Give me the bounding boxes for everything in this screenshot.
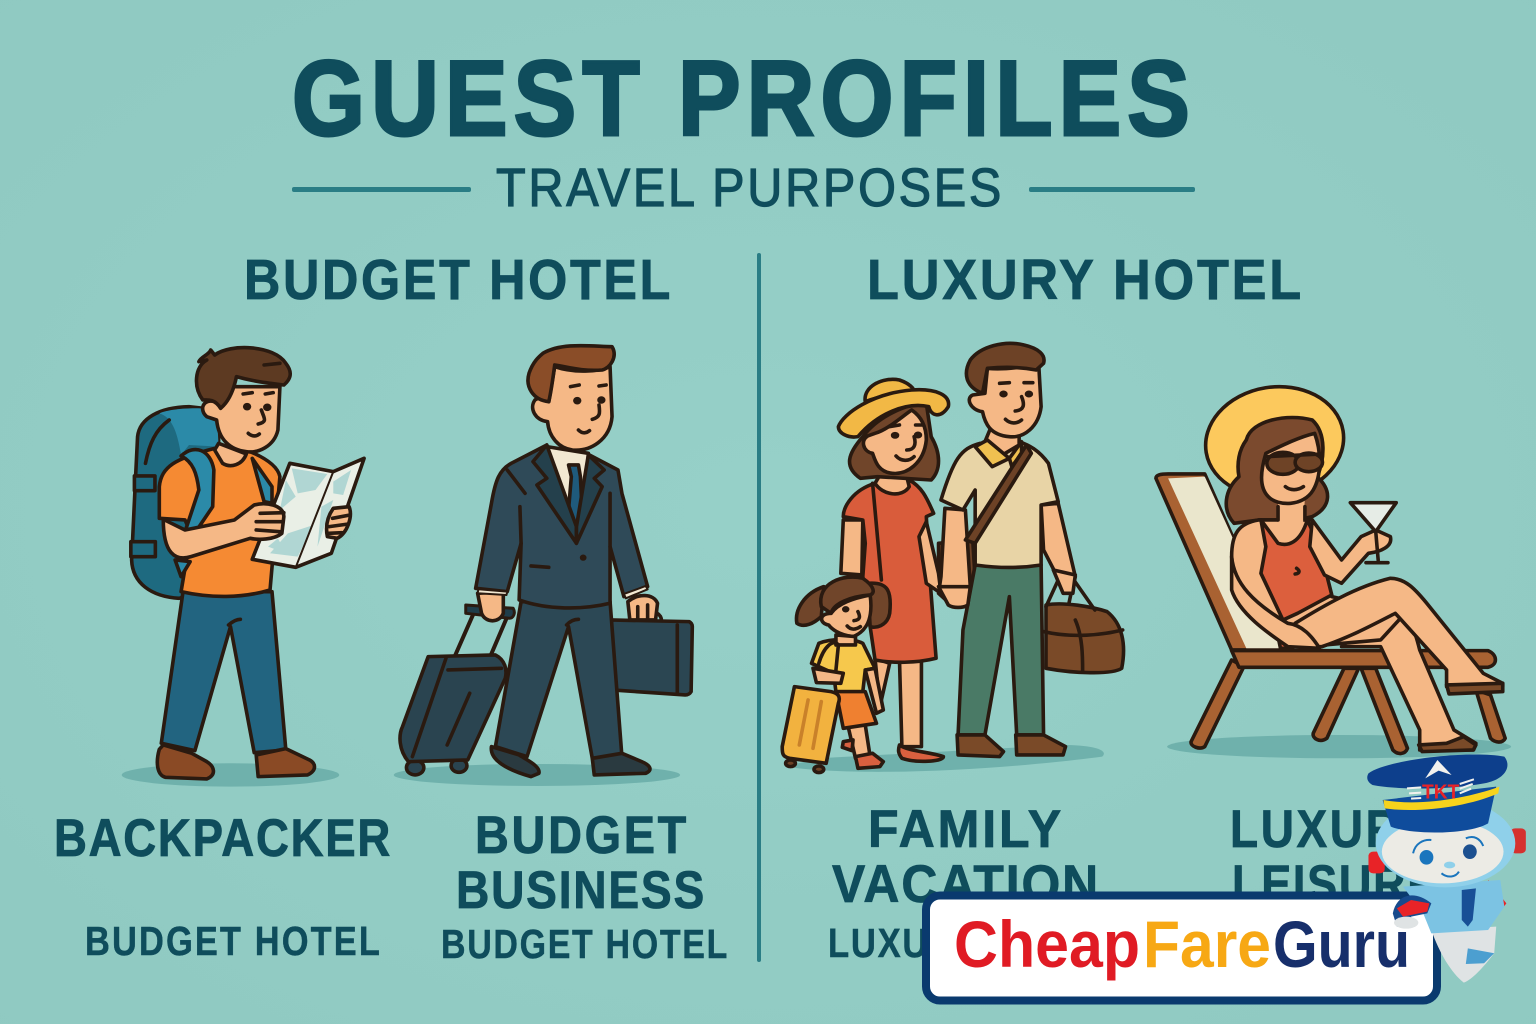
label: luxury leisure: LUXURY: [1230, 800, 1433, 859]
heading: budget hotel: BUDGET HOTEL: [244, 248, 673, 312]
child with suitcase: [782, 577, 890, 773]
label: budget business: [441, 806, 729, 967]
briefcase: [610, 610, 692, 695]
woman's hair: [1226, 417, 1328, 523]
label: budget business: BUSINESS: [456, 861, 706, 920]
folded map: [252, 458, 364, 567]
label: family vacation: [828, 800, 1116, 966]
label: family vacation: VACATION: [832, 855, 1100, 914]
mascot cap: [1367, 755, 1507, 833]
logo badge: CheapFareGuru: Guru: [1273, 907, 1410, 981]
mascot body: [1393, 880, 1506, 983]
sun hat: [1191, 378, 1358, 505]
label: backpacker: [54, 809, 392, 964]
logo badge: CheapFareGuru: Cheap: [954, 907, 1140, 981]
pants: [161, 592, 286, 753]
held hands: [939, 570, 1075, 607]
logo badge: CheapFareGuru: Fare: [1143, 907, 1271, 981]
backpacker head: [196, 348, 290, 466]
lounger chair: [1156, 474, 1505, 754]
suit trousers and shoes: [491, 602, 650, 777]
mother: [838, 379, 949, 761]
heading: luxury hotel: LUXURY HOTEL: [867, 248, 1304, 312]
label: family vacation: FAMILY: [868, 800, 1064, 859]
logo badge: CheapFareGuru: [926, 896, 1437, 1000]
father: [939, 343, 1075, 757]
subtitle: travel purposes: [292, 158, 1195, 218]
subtitle: travel purposes: TRAVEL PURPOSES: [496, 158, 1004, 218]
label: budget business: BUDGET: [475, 806, 689, 865]
mascot: pilot character: [1367, 755, 1526, 983]
torso and swimsuit: [1232, 520, 1405, 648]
mascot cap: TKT: [1422, 781, 1460, 803]
rolling suitcase: [400, 605, 514, 775]
hands and arm: [163, 504, 350, 558]
figure: family vacation: [782, 343, 1124, 773]
arms: [1232, 520, 1391, 648]
woman's face: [1262, 433, 1322, 531]
businessman head: [528, 346, 614, 450]
label: budget business: BUDGET HOTEL: [441, 921, 729, 967]
orange t-shirt: [159, 448, 280, 596]
lower crossed leg: [1342, 613, 1476, 752]
label: backpacker: BUDGET HOTEL: [85, 918, 382, 964]
martini glass: [1350, 503, 1396, 563]
hands: [478, 592, 658, 621]
figure: budget business traveller: [394, 346, 692, 786]
label: family vacation: LUXURY HOTEL: [828, 920, 1116, 966]
figure: backpacker: [122, 348, 364, 787]
icon: backpack: [131, 407, 219, 598]
suit jacket: [476, 445, 648, 608]
label: backpacker: BACKPACKER: [54, 809, 392, 868]
duffel bag: [1044, 580, 1124, 673]
mascot head: [1368, 799, 1526, 887]
label: luxury leisure: [1230, 800, 1439, 914]
upper leg: [1295, 578, 1503, 694]
title: GUEST PROFILES: [292, 38, 1196, 158]
label: luxury leisure: LEISURE: [1232, 855, 1439, 914]
figure: luxury leisure woman on lounger: [1156, 378, 1511, 758]
